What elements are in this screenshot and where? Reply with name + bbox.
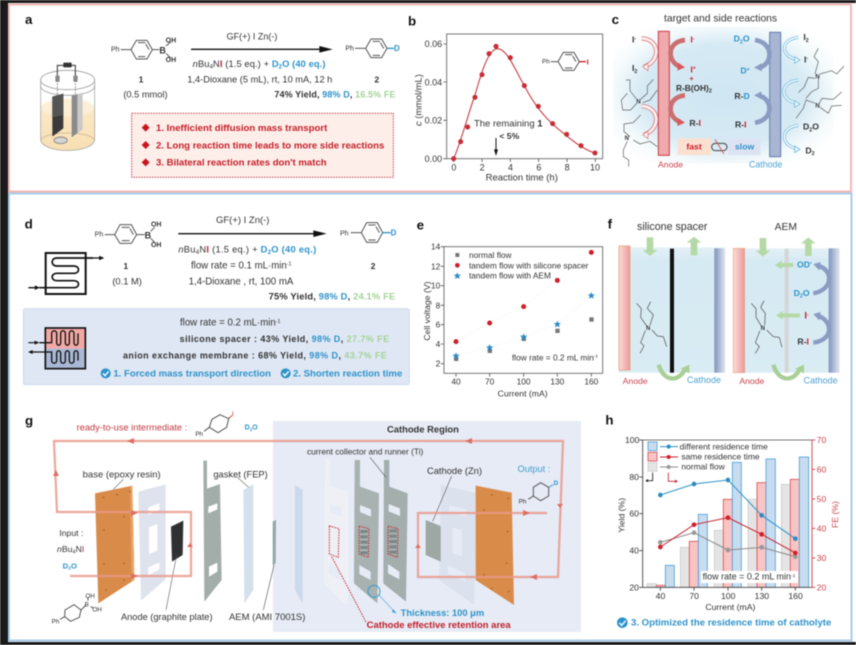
fast box: fast [686,142,702,152]
icon: serpentine flow cell [28,253,104,294]
species labels: - [634,36,636,42]
scatter chart: cell voltage: 100 [517,377,531,387]
legend: normal flow [681,462,726,472]
legend: different residence time [680,442,768,452]
species labels: 2 [809,127,812,133]
axis labels [616,435,840,612]
line chart: concentration vs time: < 5% [499,131,520,141]
product 2: Ph [345,46,354,53]
species labels: R-B(OH) [676,83,709,93]
circulation pipes [54,441,563,577]
species labels: D [805,145,812,155]
heading: AEM: AEM [775,222,797,233]
reaction arrow and conditions: 2 [279,65,283,71]
axis labels: FE (%) [830,501,840,528]
retention area label: Cathode effective retention area [367,620,512,630]
line chart: concentration vs time: 0.04 [425,77,442,87]
line chart: concentration vs time: 2 [480,163,485,173]
cell: AEM: 2 [800,294,803,300]
reaction arrow and conditions: 1,4-Dioxane , rt, 100 mA [189,276,294,287]
cell: AEM: N [761,326,765,332]
scatter chart: cell voltage: Current (mA) [498,389,548,399]
scatter chart: cell voltage: 130 [550,377,565,387]
reactant 1: OH [166,57,176,64]
line chart: concentration vs time: 0.00 [425,154,442,164]
species labels: - [693,36,695,42]
intermediate label: 2 [250,427,253,432]
cell: silicone spacer: Anode [623,376,648,386]
cell: AEM: Anode [739,376,765,386]
callout lines and labels: 2 [68,566,71,572]
line chart: concentration vs time: 10 [590,163,600,173]
slow box: slow [735,142,755,152]
frame plate [439,485,477,605]
reactant 1: B [145,230,152,240]
bars: normal flow [647,484,790,587]
reaction arrow and conditions: nBu [193,59,210,69]
panel h [605,413,840,628]
cell: silicone spacer: N [646,326,650,332]
axis labels: 60 [629,509,639,519]
axis labels: 40 [656,591,665,601]
label h: h [605,413,613,428]
panel: a frame [9,4,851,192]
callout: limitations: 3. Bilateral reaction rates don't match [156,158,327,168]
product 2: 2 [374,75,379,85]
benefit 1: 1. Forced mass transport direction [113,369,271,379]
panel: d to h frame [9,194,852,640]
intermediate label: ready-to-use intermediate : [77,423,187,433]
reactant 1: OH [166,38,176,45]
species labels: 2 [812,151,815,157]
scatter chart: cell voltage: tandem flow with silicone spacer [469,260,589,270]
product 2: D [394,44,400,53]
reactant 1: (0.5 mmol) [123,90,168,100]
scatter chart: cell voltage: 160 [584,377,599,387]
species labels: O [812,122,819,132]
icon: broken link [712,139,727,154]
axis labels: 100 [721,591,736,601]
intermediate label: D [245,425,250,432]
species labels: I [690,64,693,74]
product 2: 2 [371,261,376,271]
axis labels: 40 [817,523,826,533]
label d: d [25,217,33,232]
faint plate [324,459,348,603]
scatter chart: cell voltage: normal flow [469,250,513,260]
line chart: concentration vs time [413,34,603,184]
labels: Cathode (Zn) [427,466,482,476]
titanium plate B [383,460,408,602]
fast box [678,138,711,155]
panel e [417,217,603,399]
line chart: concentration vs time: 0 [451,163,456,173]
scatter chart: cell voltage: 2 [436,359,441,369]
reactant 1: 1 [139,75,144,85]
species labels: I [632,35,634,45]
callout lines and labels: gasket (FEP) [213,469,268,479]
reactant 1: 1 [123,261,128,271]
panel f [608,216,840,386]
scatter chart: cell voltage [422,242,603,399]
species labels: 2 [806,38,809,44]
bars: different residence time [665,457,809,587]
titanium plate [203,461,222,602]
species labels: - [806,56,808,62]
cell: AEM: OD [797,259,810,269]
species labels: 2 [740,39,743,45]
gasket [243,484,253,603]
reaction arrow and conditions: 4 [196,250,200,256]
line chart: concentration vs time: Reaction time (h) [486,173,558,184]
cell: AEM [733,237,840,386]
flow rate note: -1 [791,573,796,579]
intermediate label: O [252,425,258,432]
axis direction arrows [645,473,678,483]
axis labels: 20 [629,582,639,592]
labels: current collector and runner (Ti) [307,447,424,457]
species labels: I [803,32,806,42]
reactant 1: OH [151,242,161,249]
output molecule: D [554,480,559,487]
callout: tandem flow results: flow rate = 0.2 mL·min [180,318,276,329]
input molecule: OH [92,606,102,613]
line: same residence time [658,515,798,555]
axis labels: 130 [755,591,769,601]
callout lines and labels [57,469,305,623]
species labels: D [803,122,809,132]
panel d [23,215,409,385]
heading c: target and side reactions [664,14,777,25]
reaction arrow and conditions: N [199,244,206,254]
cell: AEM: • [810,261,812,267]
axis labels: 40 [629,546,639,556]
graphite anode [171,521,183,562]
reactant 1 [95,222,161,287]
callout lines and labels: nBu [57,544,72,554]
callout lines and labels: D [63,561,68,570]
callout lines and labels: Input : [59,528,83,538]
reactant 1: (0.1 M) [112,277,142,287]
anode [658,31,683,170]
product 2 [345,39,400,85]
molecule: tetrabutylammonium left [621,79,657,167]
callout lines and labels: Anode (graphite plate) [121,612,213,622]
reaction arrow and conditions: 1,4-Dioxane (5 mL), rt, 10 mA, 12 h [187,75,332,85]
retention area outlines [329,526,398,622]
cathode: Cathode [749,160,782,170]
panel b [408,13,603,184]
icon: tandem flow cell [28,328,85,369]
product 2 [340,223,397,271]
titanium plate A [354,460,379,603]
callout lines and labels: O [71,561,77,570]
callout lines and labels: 4 [72,549,76,555]
panel c [612,12,844,170]
reaction background [613,27,833,163]
reaction arrow and conditions: I (1.5 eq.) + D [206,244,268,254]
legend [648,442,768,472]
reactant 1 [111,38,176,100]
panel g [25,411,581,632]
base epoxy plate [95,486,134,603]
cell: AEM: R-I [797,336,809,346]
cell: silicone spacer: Cathode [687,375,721,385]
line chart: concentration vs time: The remaining 1 [474,119,543,130]
reaction arrow and conditions: 2 [268,250,272,256]
label a: a [25,12,33,27]
input molecule: Ph [52,618,60,625]
line chart: concentration vs time: c (mmol/mL) [413,74,423,126]
species labels: I [632,63,634,73]
axis labels: 50 [817,494,826,504]
scatter chart: cell voltage: Cell voltage (V) [422,281,432,341]
cathode [749,32,782,170]
line: normal flow [658,530,798,559]
reaction arrow and conditions: 4 [210,65,214,71]
anode: Anode [658,160,683,170]
axis labels: 60 [817,464,826,474]
axis labels: 70 [689,591,699,601]
bars: same residence time [656,479,799,587]
callout: tandem flow results: -1 [276,319,281,325]
molecule: tetrabutylammonium right: N [815,74,820,80]
intermediate label: Ph [195,431,204,438]
label g: g [25,413,33,428]
line chart: concentration vs time: 0.06 [425,39,442,49]
output molecule [519,480,559,505]
molecule: tetrabutylammonium right: N [815,104,820,110]
label c: c [612,12,620,27]
species labels: D [734,34,740,44]
line chart: concentration vs time: I [587,57,589,66]
panel a [25,12,400,177]
input molecule [52,593,102,625]
thickness callout [368,585,484,618]
anode arrows [642,38,685,135]
anode side stack [52,461,305,625]
axis labels: 70 [817,435,826,445]
species labels: R-D [734,91,750,101]
scatter chart: cell voltage: 8 [436,300,441,310]
axis labels: 20 [817,582,826,592]
label b: b [408,13,416,28]
label f: f [608,216,613,231]
reaction arrow and conditions: I (1.5 eq.) + D [220,59,279,69]
intermediate label [77,411,258,438]
scatter chart: cell voltage: 14 [431,242,441,252]
axis labels: Yield (%) [616,498,626,533]
callout: limitations [132,113,393,177]
scatter chart: cell voltage: 4 [436,339,441,349]
bar and line chart: yield and FE [616,435,840,612]
anode arrow heads [643,63,685,139]
reaction arrow and conditions: GF(+) I Zn(-) [216,215,269,226]
cell: AEM: O [803,288,810,298]
callout: tandem flow results: silicone spacer : 43% Yield, 98% D, 27.7% FE [180,334,390,344]
species labels: R-I [735,119,747,129]
scatter chart: cell voltage: tandem flow with AEM [469,270,551,280]
plot frame and axes [639,440,815,591]
reactant 1: OH [151,222,161,229]
line chart: concentration vs time: 4 [508,163,513,173]
scatter chart: cell voltage: 10 [431,281,441,291]
product 2: Ph [340,230,349,237]
axis labels: 100 [625,435,640,445]
species labels: I [690,35,693,45]
line chart: concentration vs time: 0.02 [425,116,442,126]
scatter chart: cell voltage: 6 [436,320,441,330]
molecule: tetrabutylammonium left: N [625,136,629,142]
reactant 1: Ph [95,232,103,239]
species labels [632,32,819,157]
reaction arrow and conditions: O (40 eq.) [282,59,326,69]
labels [307,447,550,521]
line chart: concentration vs time: Ph [542,59,550,66]
species labels: + [747,67,750,73]
input molecule: OH [85,593,95,600]
callout: limitations: 2. Long reaction time leads to more side reactions [156,140,384,150]
cathode arrows [755,37,798,149]
axis labels: 160 [788,591,803,601]
species labels: I [804,54,806,64]
callout lines and labels: I [82,544,84,554]
species labels: D [740,66,747,76]
line chart: concentration vs time: 6 [536,163,541,173]
benefit 2: 2. Shorten reaction time [293,369,402,379]
cathode side stack [295,447,559,630]
cell: silicone spacer [619,237,725,386]
callout lines and labels: base (epoxy resin) [83,469,161,480]
labels: Output : [518,464,550,474]
line chart: concentration vs time: 8 [565,163,570,173]
AEM [273,520,276,565]
callout lines and labels: N [76,544,82,554]
cell: AEM: D [794,288,800,298]
slow box [728,138,761,155]
species labels: O [743,34,750,44]
faint gasket [295,485,303,603]
species labels: 2 [634,69,637,75]
reaction arrow and conditions: -1 [287,262,292,268]
molecule: tetrabutylammonium left: N [636,99,641,105]
cell: AEM: I [804,311,807,321]
heading: cathode region: Cathode Region [387,424,459,434]
reactant 1: Ph [111,47,120,54]
molecule: tetrabutylammonium right [796,48,844,118]
scatter chart: cell voltage: 40 [451,377,461,387]
reaction arrow and conditions [187,31,396,100]
zinc cathode [426,520,441,562]
callout: tandem flow results [23,309,409,385]
thickness callout: Thickness: 100 μm [401,608,484,618]
retention slots [360,529,397,554]
output molecule: Ph [519,498,527,505]
label e: e [417,217,424,232]
input molecule: B [85,602,89,609]
reaction arrow and conditions: O (40 eq.) [271,244,316,254]
species labels: + [693,66,696,72]
axis labels: 80 [629,472,639,482]
scatter chart: cell voltage: -1 [594,354,598,359]
heading: silicone spacer: silicone spacer [637,221,708,233]
icon: beaker cell [41,63,95,150]
species labels: R-I [689,118,701,128]
cell: AEM: - [807,312,809,318]
reaction arrow and conditions: nBu [178,244,196,254]
base epoxy plate [476,486,514,605]
reaction arrow and conditions: N [213,59,220,69]
frame plate [138,484,166,601]
reactant 1: B [159,45,166,55]
reaction arrow and conditions: 75% Yield, 98% D, 24.1% FE [269,292,395,302]
scatter chart: cell voltage: 70 [485,377,495,387]
product 2: D [391,228,397,237]
flow direction arrows [53,438,563,580]
species labels: 2 [709,89,712,95]
flow rate note: flow rate = 0.2 mL min [703,572,791,582]
intermediate label: I [232,411,234,418]
callout: tandem flow results: anion exchange membrane : 68% Yield, 98% D, 43.7% FE [123,351,387,361]
scatter chart: cell voltage: flow rate = 0.2 mL min [512,352,594,362]
callout: limitations: 1. Inefficient diffusion mass transport [156,123,327,133]
callout lines and labels: AEM (AMI 7001S) [229,612,305,623]
axis labels: 30 [817,553,826,563]
cathode arrow heads [754,57,800,153]
cathode region background [273,421,581,632]
reaction arrow and conditions [178,215,395,302]
scatter chart: cell voltage: 12 [431,261,441,271]
benefit 3: 3. Optimized the residence time of catholyte [631,618,831,628]
reaction arrow and conditions: GF(+) I Zn(-) [227,31,277,41]
cell: AEM: Cathode [804,376,838,386]
line: different residence time [658,478,798,541]
reaction arrow and conditions: flow rate = 0.1 mL·min [191,260,287,271]
species labels: + [689,74,694,83]
axis labels: Current (mA) [705,602,755,612]
reaction arrow and conditions: 74% Yield, 98% D, 16.5% FE [274,90,396,100]
legend: same residence time [681,452,760,462]
